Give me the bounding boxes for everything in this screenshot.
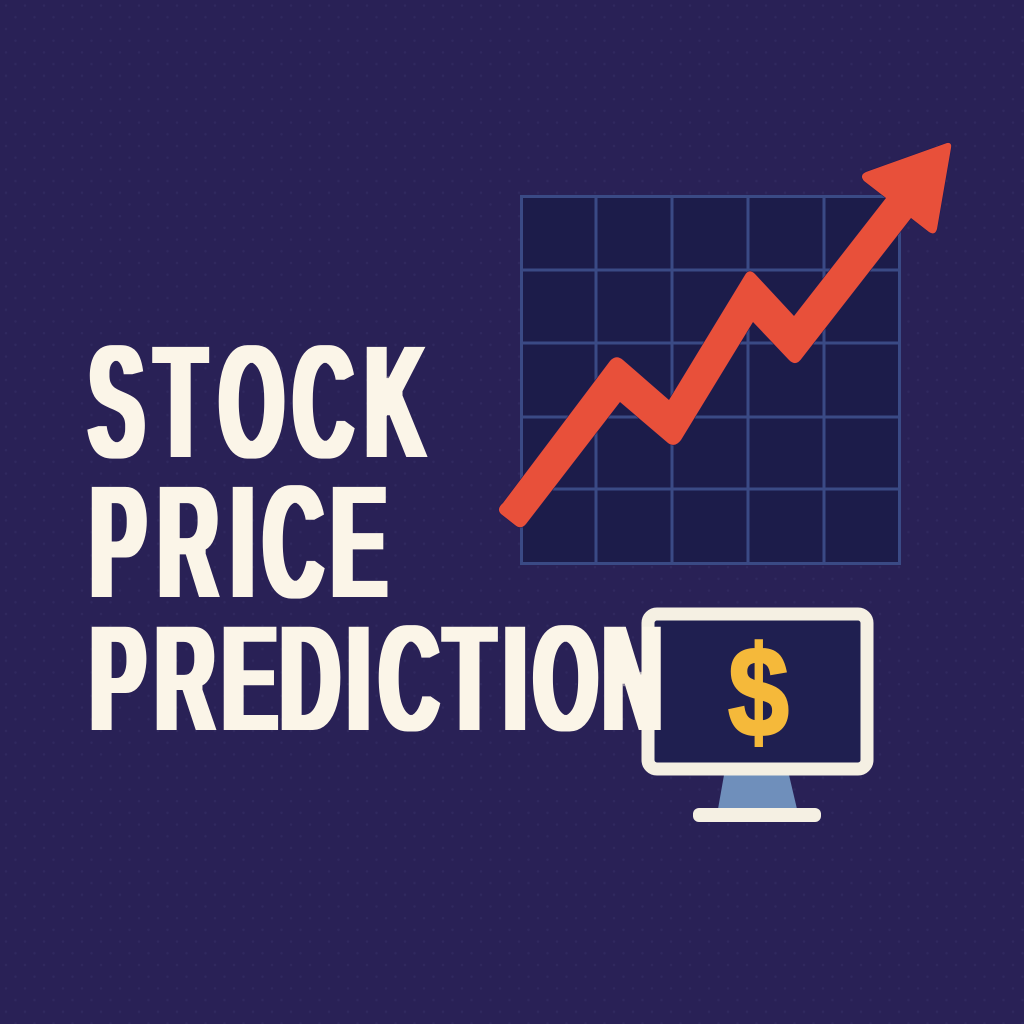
monitor base	[693, 808, 821, 822]
title line: PRICE: PRICE	[90, 452, 387, 633]
chart grid panel	[522, 196, 900, 564]
title: Stock Price Prediction	[89, 312, 662, 765]
arrow: rising red trend line	[499, 143, 951, 527]
title line: PREDICTION: PREDICTION	[90, 594, 662, 765]
monitor stand	[718, 775, 797, 809]
monitor frame and screen	[648, 614, 867, 769]
title line: STOCK: STOCK	[89, 312, 425, 493]
dollar sign: $	[728, 621, 789, 764]
icon: computer monitor with dollar sign	[648, 614, 867, 822]
